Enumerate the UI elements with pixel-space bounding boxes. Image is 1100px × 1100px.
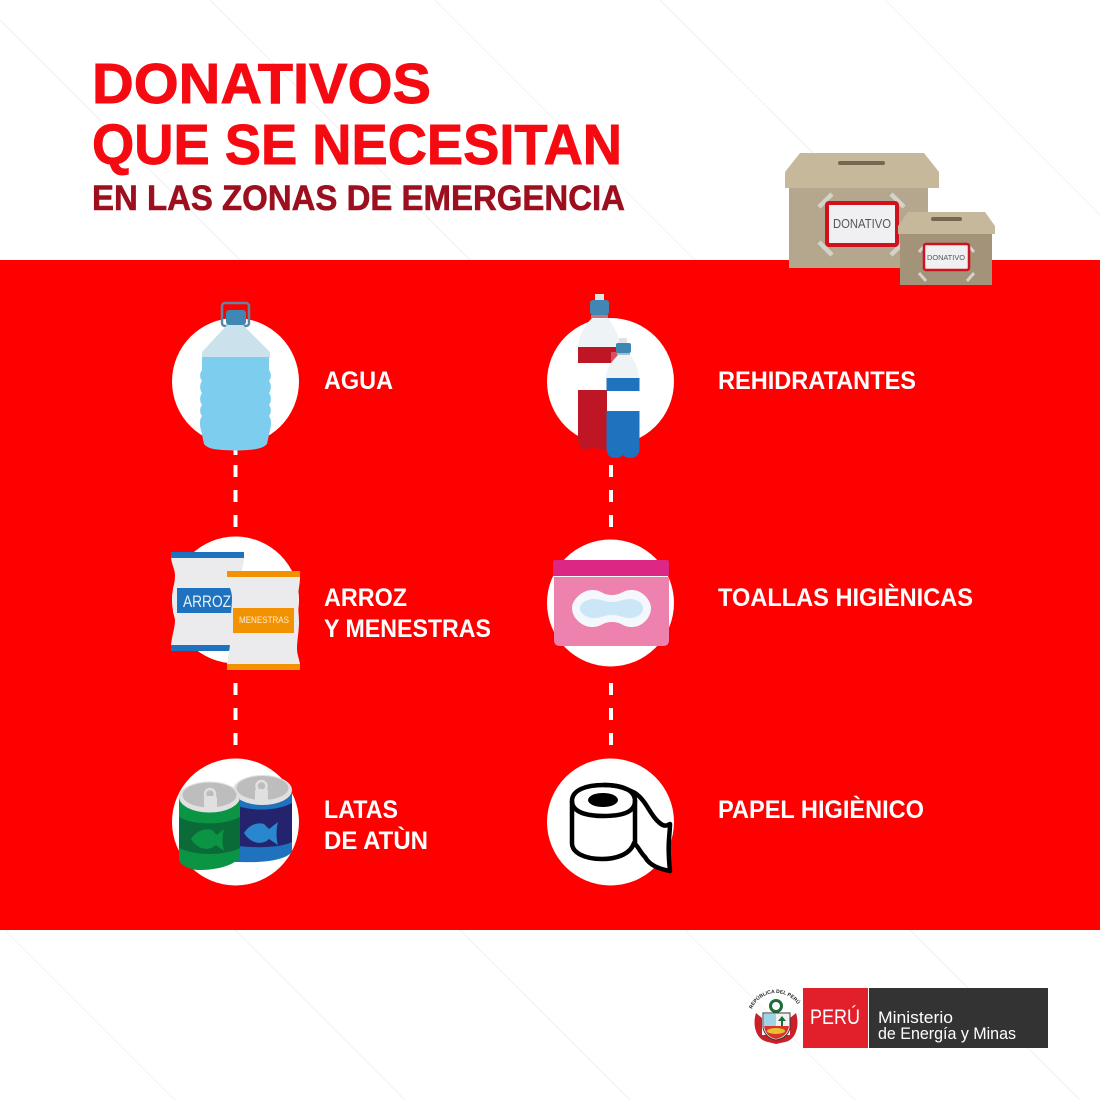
circle: agua	[172, 318, 299, 445]
logo: peru ministry: de Energía y Minas	[878, 1024, 1016, 1043]
label: papel higienico: PAPEL HIGIÈNICO	[718, 795, 924, 824]
label: arroz y menestras	[324, 584, 491, 643]
icon: rice and legume bags: ARROZ	[183, 593, 231, 611]
circle: arroz	[172, 536, 299, 664]
icon: rice and legume bags: MENESTRAS	[239, 615, 289, 626]
label: arroz y menestras: ARROZ	[324, 584, 407, 612]
logo: coat of arms: REPÚBLICA DEL PERÚ	[749, 990, 800, 1009]
title: DONATIVOS	[92, 52, 431, 116]
title: QUE SE NECESITAN	[92, 113, 622, 177]
logo: peru ministry	[803, 988, 1048, 1048]
circle: rehidratantes	[547, 318, 674, 445]
icon: bottles	[578, 294, 640, 458]
icon: rice and legume bags	[171, 552, 300, 670]
connector lines	[236, 450, 611, 745]
red panel	[0, 260, 1100, 930]
label: arroz y menestras: Y MENESTRAS	[324, 615, 491, 643]
label: latas de atun	[324, 796, 428, 855]
icon: toilet paper roll	[572, 785, 670, 871]
label: latas de atun: DE ATÙN	[324, 825, 428, 855]
icon: donation boxes	[785, 153, 995, 285]
icon: water bottle	[200, 303, 271, 450]
logo: peru ministry: Ministerio	[878, 1008, 953, 1027]
logo: coat of arms	[749, 990, 800, 1044]
circle: toallas	[547, 540, 674, 666]
label: latas de atun: LATAS	[324, 796, 398, 824]
icon: donation boxes: DONATIVO	[833, 217, 891, 231]
circle: latas	[172, 758, 299, 886]
icon: tuna cans	[179, 775, 292, 870]
label: toallas: TOALLAS HIGIÈNICAS	[718, 583, 973, 612]
title: EN LAS ZONAS DE EMERGENCIA	[92, 179, 625, 218]
label: rehidratantes: REHIDRATANTES	[718, 367, 916, 395]
title	[92, 52, 625, 218]
circle: papel	[547, 758, 674, 886]
icon: donation boxes: DONATIVO	[927, 253, 965, 262]
icon: sanitary pads pack	[553, 560, 669, 646]
label: agua: AGUA	[324, 367, 393, 395]
logo: peru ministry: PERÚ	[810, 1006, 860, 1029]
